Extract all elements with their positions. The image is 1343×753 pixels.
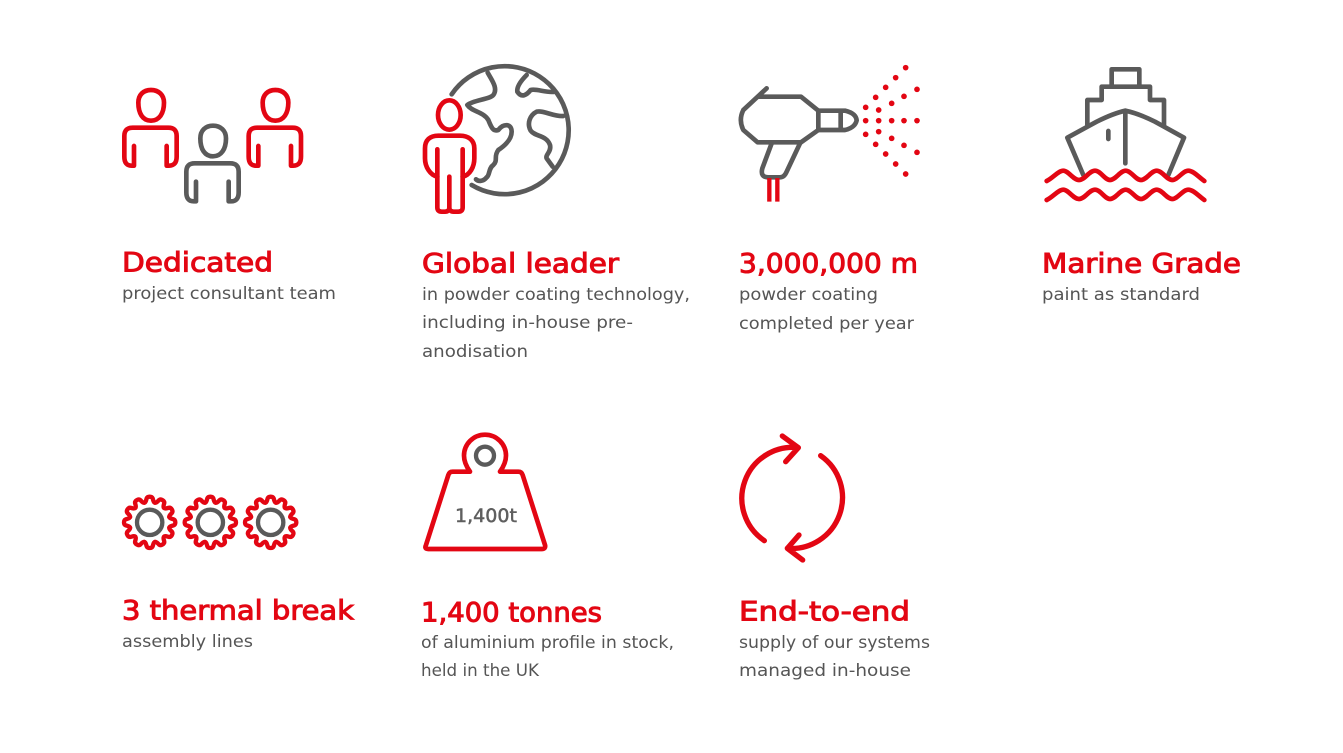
icon: circular arrows xyxy=(742,436,842,560)
text: supply managed in-house xyxy=(739,633,930,680)
panel: aluminium stock xyxy=(421,435,674,680)
text: powder coating completed per year xyxy=(739,285,914,333)
text: powder coating completed per year: completed per year xyxy=(739,314,914,333)
text: powder coating technology description: anodisation xyxy=(422,342,528,361)
panel: thermal break lines xyxy=(122,497,354,651)
panel: dedicated team xyxy=(122,90,336,303)
icon: person and globe xyxy=(425,66,569,212)
text: powder coating technology description: in powder coating technology, xyxy=(422,285,690,304)
text: paint as standard: paint as standard xyxy=(1042,285,1200,304)
icon: ship on waves xyxy=(1047,69,1204,200)
icon: 1,400t weight: 1,400t xyxy=(455,505,517,527)
heading: Marine Grade: Marine Grade xyxy=(1042,248,1241,280)
heading: Dedicated: Dedicated xyxy=(122,248,273,278)
text: powder coating completed per year: powder coating xyxy=(739,285,878,304)
panel: end-to-end supply xyxy=(739,436,930,680)
text: assembly lines: assembly lines xyxy=(122,632,253,651)
panel: powder coating volume xyxy=(739,65,920,333)
heading: Global leader: Global leader xyxy=(422,248,620,280)
heading: End-to-end: End-to-end xyxy=(739,596,910,628)
heading: 1,400 tonnes: 1,400 tonnes xyxy=(421,598,602,628)
heading: 3 thermal break: 3 thermal break xyxy=(122,596,354,626)
text: aluminium profile in stock: of aluminium profile in stock, xyxy=(421,633,674,652)
text: aluminium profile in stock: held in the UK xyxy=(421,661,540,680)
text: project consultant team: project consultant team xyxy=(122,284,336,303)
panel: marine grade xyxy=(1042,69,1241,304)
text: supply managed in-house: supply of our systems xyxy=(739,633,930,652)
text: aluminium profile in stock xyxy=(421,633,674,680)
icon: three people xyxy=(124,90,301,201)
heading: 3,000,000 m: 3,000,000 m xyxy=(739,248,918,280)
panel: global leader xyxy=(422,66,690,361)
text: powder coating technology description: including in-house pre- xyxy=(422,313,633,332)
text: powder coating technology description xyxy=(422,285,690,361)
text: supply managed in-house: managed in-house xyxy=(739,661,911,680)
icon: three gears xyxy=(124,497,296,548)
icon: spray gun xyxy=(741,65,920,202)
icon: 1,400t weight xyxy=(425,435,545,549)
